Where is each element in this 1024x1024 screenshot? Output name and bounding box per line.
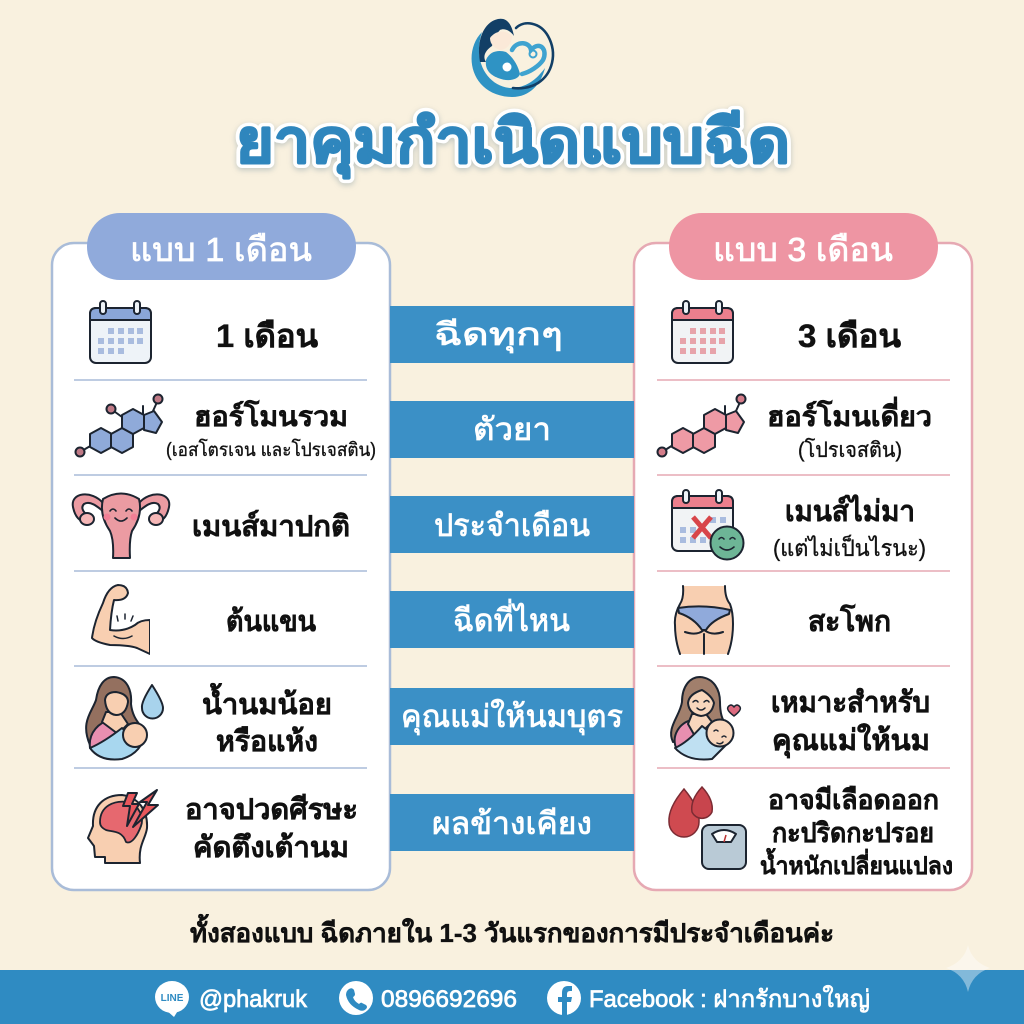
text: combined hormone [166, 399, 376, 461]
icon: phone [339, 981, 373, 1015]
logo [472, 19, 553, 97]
icon: calendar blue [90, 301, 151, 363]
icon: upper arm [92, 585, 153, 656]
icon: hips [675, 586, 733, 654]
text: LINE id: @phakruk [199, 986, 308, 1013]
text: no period, it is fine [773, 494, 926, 561]
text: no period, it is fine: (แต่ไม่เป็นไรนะ) [773, 533, 926, 561]
label: injection site [390, 591, 634, 648]
text: normal periods: เมนส์มาปกติ [192, 509, 350, 543]
title: ยาคุมกำเนิดแบบฉีด [236, 108, 790, 179]
pill heading [87, 213, 356, 280]
text: less milk or dry: น้ำนมน้อย [202, 682, 332, 721]
comparison labels [390, 306, 634, 851]
card [634, 243, 972, 890]
icon: mother nursing with water drop [86, 677, 163, 760]
text: every 3 months: 3 เดือน [798, 318, 901, 354]
icon: Facebook [547, 981, 581, 1015]
label: nursing mothers [390, 688, 634, 745]
text: suitable for nursing mothers [771, 687, 930, 758]
text: single hormone [767, 396, 932, 462]
text: phone number: 0896692696 [381, 986, 517, 1013]
icon: calendar with cross and smile [672, 490, 744, 560]
icon: LINE: LINE [161, 993, 184, 1004]
pill heading [669, 213, 938, 280]
text: upper arm: ต้นแขน [226, 606, 316, 638]
text: spotting, weight change: กะปริดกะปรอย [772, 818, 934, 848]
label: menstruation [390, 496, 634, 553]
card [52, 243, 390, 890]
icon: headache [88, 790, 158, 863]
text: every 1 month: 1 เดือน [216, 318, 318, 354]
text: spotting, weight change: น้ำหนักเปลี่ยนแปลง [760, 847, 953, 880]
text: no period, it is fine: เมนส์ไม่มา [785, 494, 915, 528]
note: ทั้งสองแบบ ฉีดภายใน 1-3 วันแรกของการมีประจำเดือนค่ะ [190, 913, 834, 948]
text: suitable for nursing mothers: เหมาะสำหรับ [771, 687, 930, 719]
label: drug: ตัวยา [473, 412, 551, 447]
label: drug [390, 401, 634, 458]
label: side effects [390, 794, 634, 851]
text: spotting, weight change [760, 785, 953, 880]
icon: progestin molecule [658, 394, 746, 456]
text: less milk or dry [202, 682, 332, 758]
text: hip: สะโพก [808, 603, 891, 638]
panel: three-month injection [634, 213, 972, 890]
icon: calendar pink [672, 301, 733, 363]
pill heading: แบบ 3 เดือน [713, 231, 893, 268]
text: headache, breast tenderness: อาจปวดศีรษะ [185, 794, 358, 826]
text: combined hormone: (เอสโตรเจน และโปรเจสติน) [166, 438, 376, 461]
text: headache, breast tenderness: คัดตึงเต้านม [193, 832, 349, 864]
icon: uterus [73, 494, 169, 558]
text: combined hormone: ฮอร์โมนรวม [194, 399, 348, 432]
label: nursing mothers: คุณแม่ให้นมบุตร [401, 699, 623, 736]
pill heading: แบบ 1 เดือน [130, 231, 312, 268]
icon: blood drops and scale [669, 787, 746, 869]
label: injection site: ฉีดที่ไหน [453, 599, 570, 638]
icon: combined hormone molecule [76, 394, 162, 456]
text: less milk or dry: หรือแห้ง [216, 726, 318, 758]
icon: smiling mother with baby [671, 677, 740, 760]
icon: LINE [155, 981, 189, 1017]
label: menstruation: ประจำเดือน [434, 508, 590, 543]
text: spotting, weight change: อาจมีเลือดออก [768, 785, 939, 815]
text: single hormone: (โปรเจสติน) [798, 438, 902, 462]
text: suitable for nursing mothers: คุณแม่ให้นม [772, 723, 930, 758]
panel: monthly injection [52, 213, 390, 890]
text: headache, breast tenderness [185, 794, 358, 864]
label: frequency: ฉีดทุกๆ [434, 317, 563, 354]
label: frequency [390, 306, 634, 363]
text: Facebook page: Facebook : ฝากรักบางใหญ่ [589, 985, 870, 1013]
title: ยาคุมกำเนิดแบบฉีด [236, 108, 790, 179]
label: side effects: ผลข้างเคียง [432, 806, 592, 841]
sparkle [946, 945, 990, 992]
text: single hormone: ฮอร์โมนเดี่ยว [767, 396, 932, 432]
footer bar [0, 945, 1024, 1024]
